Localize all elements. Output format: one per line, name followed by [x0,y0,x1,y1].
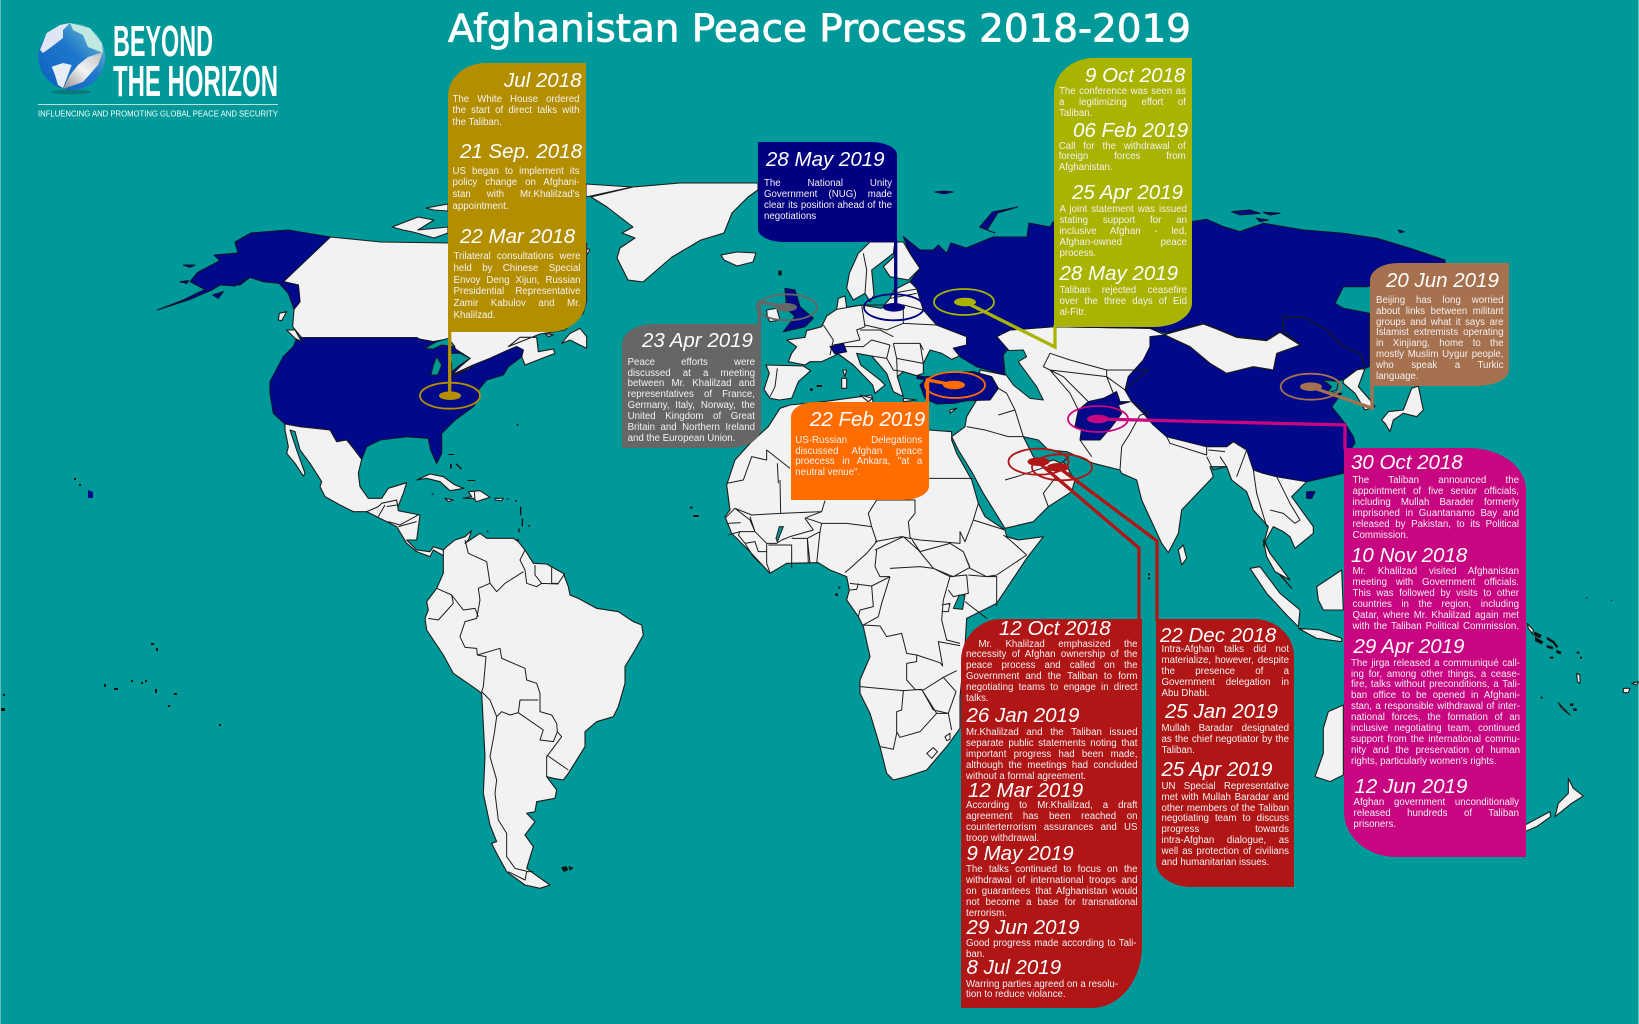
text: The talks continued to focus on the [966,864,1138,875]
text [1059,86,1186,119]
text: talks. [966,693,989,704]
text: Good progress made according to Tali- [966,938,1136,949]
globe icon [38,23,105,94]
text: clear its position ahead of the [764,200,892,211]
date: 12 Oct 2018 [999,617,1111,640]
text: proecess in Ankara, "at a [795,456,922,467]
panel: red Qatar left [961,619,1142,1008]
text: other members of the Taliban [1162,802,1289,814]
text: on guarantees that Afghanistan would [966,886,1138,897]
text: Trilateral consultations were [454,251,580,262]
text: inclusive Afghan - led, [1060,226,1187,237]
text: intra-Afghan dialogue, as [1162,835,1289,846]
text: stan, a responsible withdrawal of inter- [1351,701,1520,712]
text: well as protection of civilians [1162,846,1289,857]
map: pacific island specks [1,478,1612,726]
title: Afghanistan Peace Process 2018-2019 [448,7,1191,51]
text: The jirga released a communiqué call- [1351,658,1520,669]
text: countries in the region, including [1352,599,1519,610]
text: United Kingdom of Great [628,411,755,422]
text: including Mullah Barader formerly [1352,497,1519,508]
text: the start of direct talks with [452,105,580,116]
text: with the Taliban Political Commission. [1352,621,1519,632]
date: 8 Jul 2019 [966,956,1061,979]
panel: navy Poland [758,142,897,242]
marker: navy Poland [864,240,924,320]
date: 9 May 2019 [966,842,1074,865]
text: appointment. [452,201,509,212]
panel: olive Russia [1054,58,1192,327]
text [452,166,580,212]
text: Commission. [1352,530,1408,541]
date: 29 Jun 2019 [966,916,1079,939]
map: greenland, iceland and arctic islands [392,183,758,282]
text: Khalilzad. [454,310,496,321]
text: al-Fitr. [1060,307,1086,318]
text: separate public statements noting that [966,738,1138,749]
text [1351,658,1520,767]
text: language. [1376,371,1419,382]
text: who speak a Turkic [1376,360,1504,371]
text: representatives of France, [628,389,755,400]
text: US began to implement its [452,166,580,177]
date: 22 Feb 2019 [810,408,925,431]
text: groups and what it says are [1376,316,1504,328]
text: tion to reduce violance. [966,989,1066,1000]
text: discussed at a meeting [628,368,755,379]
text: released hundreds of Taliban [1354,808,1519,819]
text [1058,141,1186,173]
date: 22 Dec 2018 [1160,624,1276,647]
text: in Xinjiang, home to the [1376,338,1504,349]
text: a legitimizing effort of [1059,97,1186,108]
map: central and southern africa borders [725,480,1027,758]
text: necessity of Afghan ownership of the [966,649,1138,660]
date: 30 Oct 2018 [1351,450,1463,474]
date: 25 Apr 2019 [1072,181,1183,204]
text [966,864,1138,919]
text: Mr. Khalilzad emphasized the [978,639,1138,650]
text: negotiations [764,211,816,222]
text: Abu Dhabi. [1162,688,1209,699]
text: without a formal agreement. [966,771,1086,782]
text: negotiating teams to engage in direct [966,682,1138,693]
text: process. [1060,248,1096,259]
text: and humanitarian issues. [1162,857,1269,868]
date: 22 Mar 2018 [460,225,575,248]
text: national forces, the formation of an [1351,712,1520,723]
marker: orange Turkey [925,372,985,404]
text [1354,797,1519,830]
text: withdrawal of international troops and [966,875,1138,886]
text: The White House ordered [452,94,580,105]
text [1376,295,1504,382]
panel: grey United Kingdom [622,324,761,448]
text: Britain and Northern Ireland [628,422,755,433]
text: The conference was seen as [1059,86,1186,97]
marker: gold USA [420,330,480,409]
panel: red UAE right [1156,619,1294,887]
text: nity and the preservation of human [1351,745,1520,756]
text [454,251,580,321]
text [966,800,1138,844]
text: support from the international commu- [1351,734,1520,745]
date: 28 May 2019 [766,148,885,171]
text: inclusive negotiating team, continued [1351,723,1520,734]
text: Government delegation in [1162,677,1289,688]
marker: grey United Kingdom [757,294,817,326]
map: north and central america [157,230,587,557]
text [1162,723,1289,756]
text: Government and the Taliban to form [966,671,1138,682]
map: south america [425,531,643,888]
text: stan with Mr.Khalilzad's [452,189,580,200]
date: 06 Feb 2019 [1073,119,1188,142]
text: appointment of five senior officials, [1352,486,1519,497]
text: imprisoned in Guantanamo Bay and [1352,508,1519,519]
text: Presidential Representative [454,286,580,297]
text: discussed Afghan peace [795,446,922,456]
text: Call for the withdrawal of [1059,141,1186,152]
text: Peace efforts were [628,357,755,368]
text: Government (NUG) made [764,189,892,200]
map: south-east asia and oceania [1250,540,1638,832]
text: the Taliban. [452,117,502,128]
text: Warring parties agreed on a resolu- [966,979,1118,990]
text: Mullah Baradar designated [1162,723,1289,734]
text: ing for, among other things, a cease- [1351,669,1520,680]
text: According to Mr.Khalilzad, a draft [966,800,1138,811]
date: 23 Apr 2019 [642,329,753,352]
text [1352,475,1519,541]
text: Germany, Italy, Norway, the [628,400,755,411]
text: This was followed by visits to other [1352,588,1519,599]
text: UN Special Representative [1162,781,1289,792]
marker: olive Russia [934,289,1055,347]
marker: brown China [1281,374,1372,408]
text [795,435,922,478]
text: Taliban rejected ceasefire [1060,285,1187,296]
text: Mr. Khalilzad visited Afghanistan [1352,566,1519,577]
text [1162,781,1289,868]
logo: Beyond the Horizon [38,17,278,119]
date: Jul 2018 [504,68,582,92]
text [966,979,1118,1000]
text: met with Mullah Baradar and [1162,792,1289,803]
text: agreement has been reached on [966,811,1138,822]
text [1060,204,1187,259]
marker: red Qatar [1008,449,1139,621]
date: 25 Apr 2019 [1162,758,1272,781]
text: A joint statement was issued [1060,204,1187,215]
text: ban office to be opened in Afghani- [1351,690,1520,701]
date: 29 Apr 2019 [1354,635,1464,658]
panel: gold USA [448,63,586,332]
text: peace process and called on the [966,660,1138,671]
date: 26 Jan 2019 [966,704,1079,727]
date: 12 Jun 2019 [1354,775,1467,798]
text: although the meetings had concluded [966,760,1138,771]
text: rights, particularly women's rights. [1351,756,1497,767]
date: 21 Sep. 2018 [460,140,582,162]
text: stating support for an [1060,215,1187,226]
text: foreign forces from [1059,151,1186,162]
text: Islamist extremists operating [1376,327,1504,338]
text: Afghanistan. [1059,162,1113,173]
text: the presence of a [1162,666,1289,677]
text: important progress had been made, [966,749,1138,760]
text: Taliban. [1162,745,1195,756]
text [764,178,892,222]
marker: magenta Afghanistan [1068,406,1345,450]
text: troop withdrawal. [966,833,1039,844]
text: held by Chinese Special [454,263,580,274]
text [452,94,580,128]
text: materialize, however, despite [1162,655,1289,666]
text [1352,566,1519,632]
date: 10 Nov 2018 [1351,544,1467,567]
text: progress towards [1162,824,1289,835]
panel: orange Turkey [791,402,929,500]
text: The Taliban announced the [1352,475,1519,486]
text: Beijing has long worried [1376,295,1504,306]
text: terrorism. [966,908,1007,919]
text: US-Russian Delegations [795,435,922,446]
text [1060,285,1187,318]
text: between Mr. Khalilzad and [628,378,755,389]
text: and the European Union. [628,433,735,444]
text: Mr.Khalilzad and the Taliban issued [966,727,1138,738]
text: Zamir Kabulov and Mr. [454,298,580,309]
date: 12 Mar 2019 [968,779,1083,802]
date: 28 May 2019 [1060,262,1178,285]
text: Taliban. [1059,108,1092,119]
map: asia [903,191,1445,588]
text [966,639,1138,704]
text: mostly Muslim Uygur people, [1376,349,1504,360]
text: fire, talks without preconditions, a Tali- [1351,679,1520,690]
text: meeting with Government officials. [1352,577,1519,588]
text: Qatar, where Mr. Khalilzad again met [1352,610,1519,621]
text: neutral venue". [795,467,860,478]
text: The National Unity [764,178,892,189]
text: not become a base for transnational [966,897,1138,908]
map: africa and europe [690,242,1043,780]
date: 20 Jun 2019 [1386,269,1499,292]
text [628,357,755,444]
text: policy change on Afghani- [452,177,580,188]
text: Afghan-owned peace [1060,237,1187,248]
date: 25 Jan 2019 [1165,700,1278,723]
panel: magenta Afghanistan [1344,448,1526,857]
text: counterterrorism assurances and US [966,822,1138,833]
date: 9 Oct 2018 [1085,64,1185,87]
text: Envoy Deng Xijun, Russian [454,275,580,286]
text: about links between militant [1376,306,1504,317]
text: as the chief negotiator by the [1162,734,1289,745]
text: released by Pakistan, to its Political [1352,519,1519,530]
text: negotiating team to discuss [1162,813,1289,824]
text [966,938,1136,960]
marker: red UAE [1032,454,1157,621]
text [966,727,1138,782]
text: prisoners. [1354,819,1396,830]
text: Afghan government unconditionally [1354,797,1519,808]
text: ban. [966,949,985,960]
text [1162,644,1290,699]
panel: brown China [1370,263,1509,386]
text: Intra-Afghan talks did not [1162,644,1289,655]
text: over the three days of Eid [1060,296,1187,307]
